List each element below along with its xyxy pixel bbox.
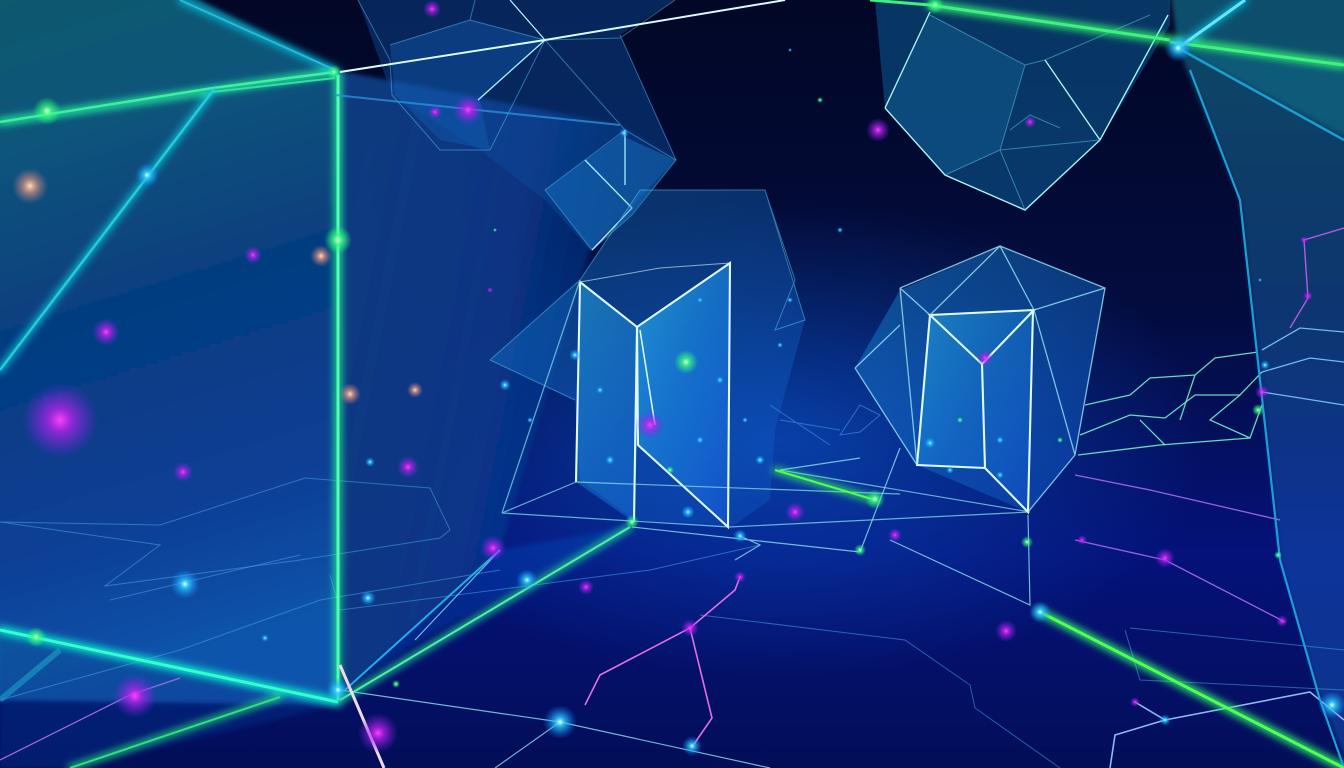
network: floor lines — [0, 405, 1344, 768]
crystal: centre back shell — [490, 190, 805, 528]
panel: right wall — [1170, 0, 1344, 768]
crystal: top right polyhedron — [875, 0, 1170, 210]
panel: large left cube faces — [0, 0, 676, 768]
network: right floating mesh — [1078, 228, 1344, 455]
crystal: centre glowing prism — [502, 263, 1030, 527]
crystal: right glowing prism — [855, 246, 1105, 512]
crystal: top centre cluster — [358, 0, 676, 250]
